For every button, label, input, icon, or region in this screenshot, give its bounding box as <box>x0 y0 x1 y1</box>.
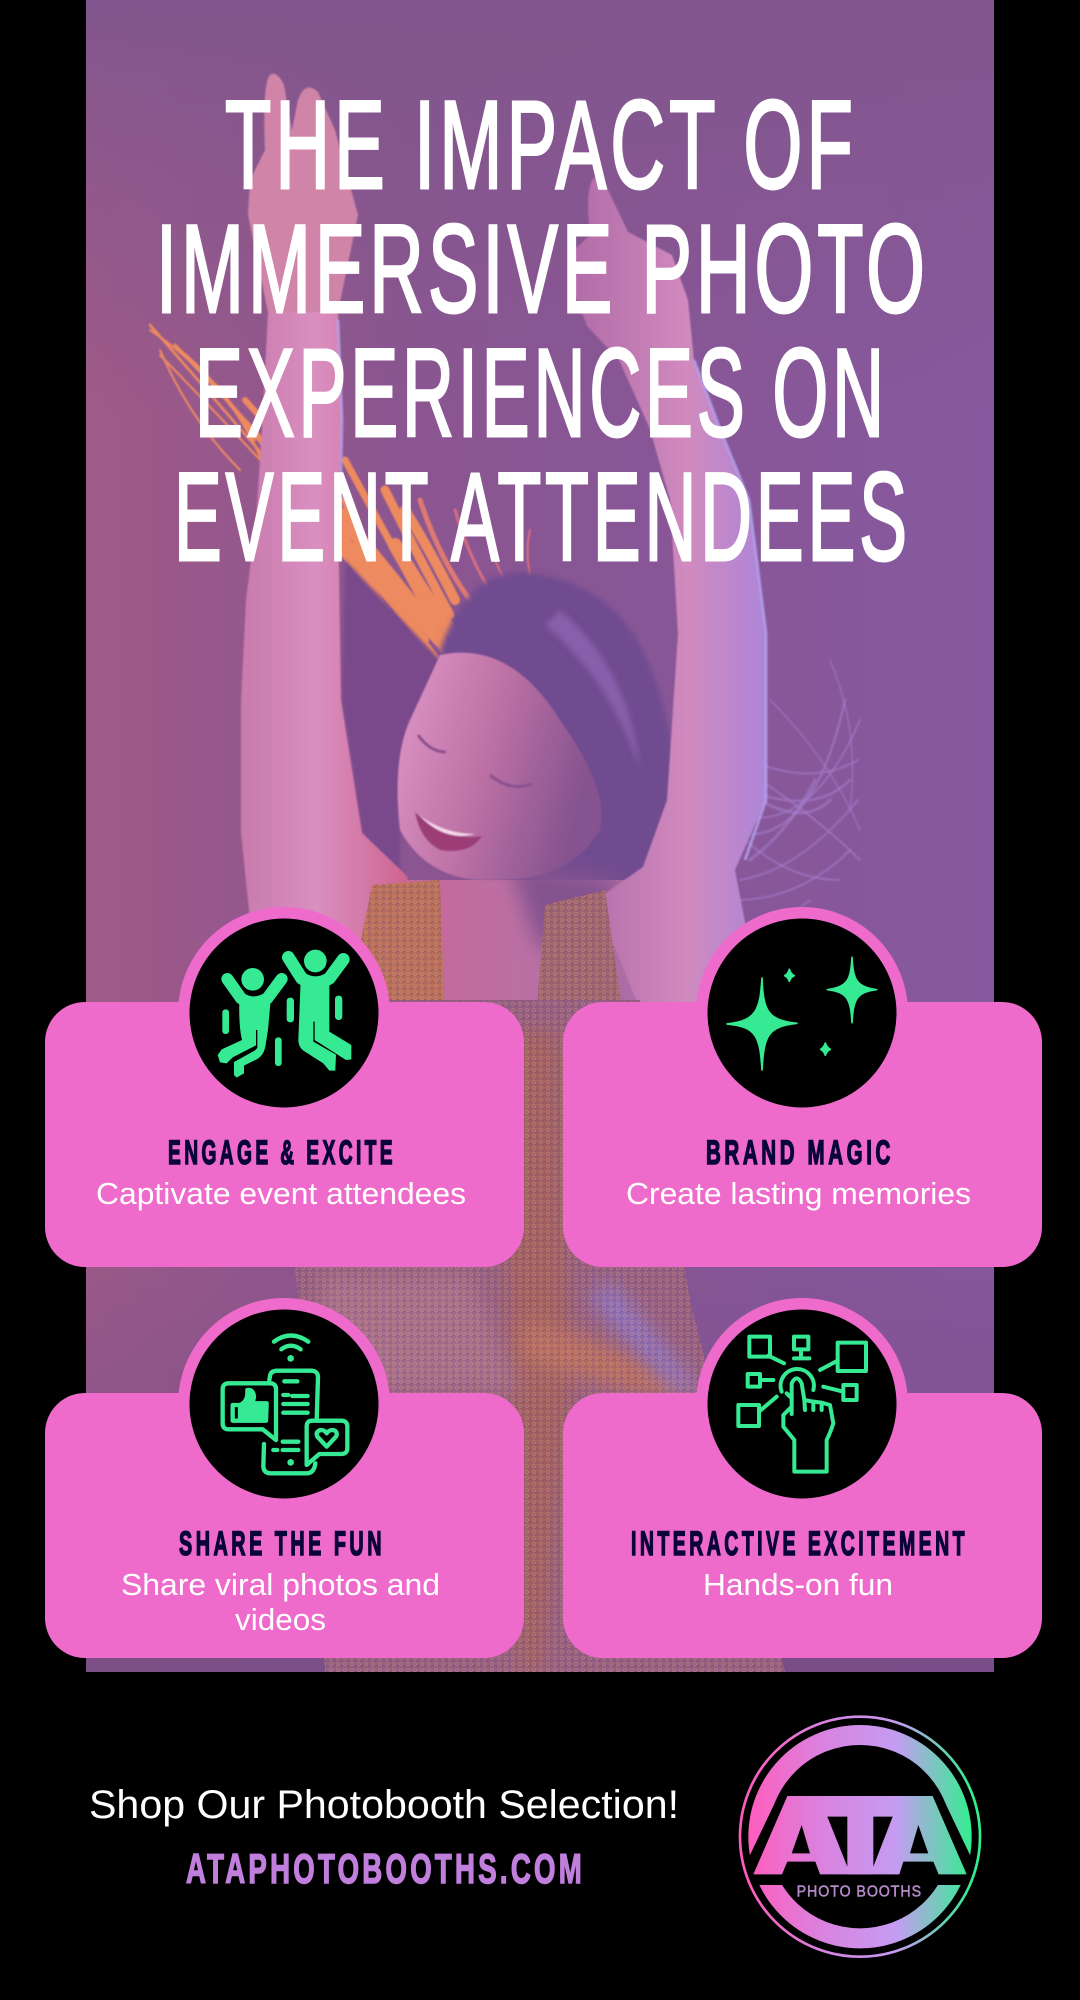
panel: brand magic <box>563 907 1042 1267</box>
panel: hero photo of dancing woman <box>86 0 994 1672</box>
description: Hands-on fun <box>703 1567 893 1602</box>
card background <box>563 907 1042 1267</box>
sequinned dress <box>295 1000 785 1672</box>
left arm and hand <box>241 74 408 990</box>
description: Share viral photos and <box>121 1567 440 1602</box>
heading: ENGAGE & EXCITE <box>168 1134 396 1172</box>
icon circle <box>708 1310 896 1498</box>
icon: sparkles <box>727 957 877 1070</box>
ATA letters <box>753 1796 967 1874</box>
icon: jumping people <box>218 950 351 1078</box>
description: videos <box>235 1602 326 1637</box>
icon circle <box>708 918 896 1108</box>
panel: share the fun <box>45 1298 524 1658</box>
photo backdrop <box>86 0 994 1672</box>
card background <box>45 907 524 1267</box>
heading: SHARE THE FUN <box>179 1525 385 1563</box>
title <box>156 76 929 587</box>
icon: phone with social bubbles <box>223 1335 347 1473</box>
right arm and hand <box>569 177 766 1010</box>
description: Create lasting memories <box>626 1176 971 1211</box>
chest and neck <box>406 880 636 1000</box>
dark hair <box>440 572 677 905</box>
smile <box>415 812 482 851</box>
ring cut-out <box>750 1793 970 1885</box>
icon: hand touching network <box>738 1337 866 1472</box>
right hair wisps <box>739 660 861 907</box>
left side of chest shadow <box>342 560 440 880</box>
card background <box>563 1298 1042 1658</box>
icon circle <box>190 1310 378 1498</box>
card background <box>45 1298 524 1658</box>
thick ring <box>758 1735 962 1938</box>
icon circle <box>190 918 378 1108</box>
face <box>398 653 602 880</box>
outer ring <box>740 1717 980 1957</box>
panel: engage and excite <box>45 907 524 1267</box>
dress straps <box>361 880 621 1000</box>
logo: ATA Photo Booths <box>740 1717 980 1957</box>
call to action text: Shop Our Photobooth Selection! <box>89 1783 679 1827</box>
description: Captivate event attendees <box>96 1176 466 1211</box>
heading: BRAND MAGIC <box>706 1134 894 1172</box>
panel: interactive excitement <box>563 1298 1042 1658</box>
lilac hair highlights <box>545 610 640 770</box>
neck shadow <box>510 860 620 950</box>
logo tagline: PHOTO BOOTHS <box>797 1883 922 1900</box>
description <box>121 1567 440 1637</box>
website link: ATAPHOTOBOOTHS.COM <box>186 1845 585 1892</box>
eyes <box>418 735 532 787</box>
lower stem cut <box>847 1867 873 1874</box>
orange flying hair <box>150 325 530 690</box>
